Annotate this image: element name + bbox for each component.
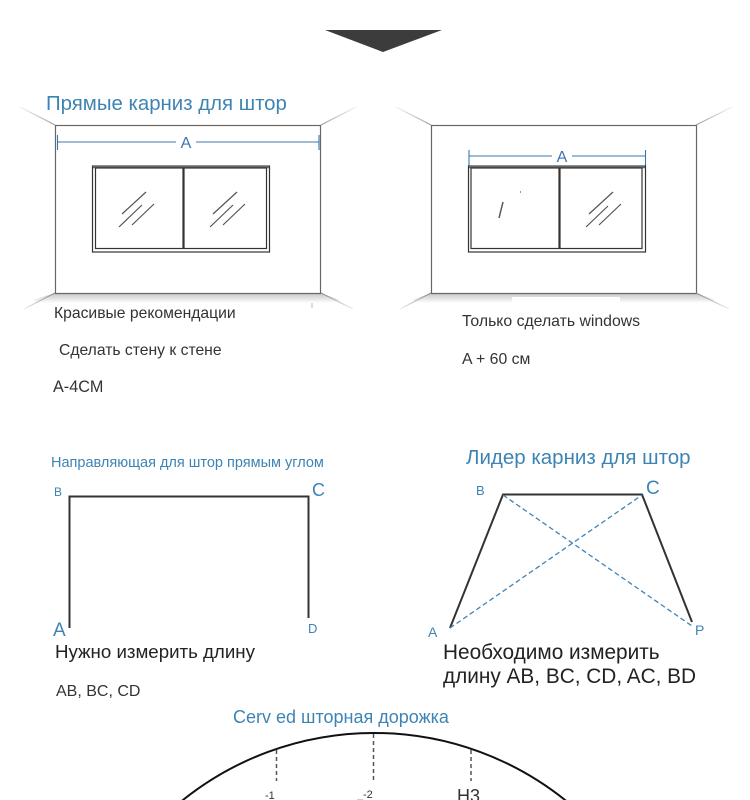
point labels: B [54, 485, 62, 499]
label A: A [181, 135, 192, 152]
point labels: B [476, 483, 485, 498]
diagram: room with window-width measurement [396, 107, 732, 309]
point labels: P [695, 622, 704, 638]
text block: measure length right: Необходимо измерить [443, 641, 660, 664]
text block: left recommendations: Сделать стену к стене [59, 342, 222, 359]
text block: measure length left [55, 641, 256, 700]
heading: curved track: Cerv ed шторная дорожка [233, 707, 450, 727]
point labels: A [428, 624, 438, 640]
heading: straight curtain rods: Прямые карниз для штор [46, 93, 287, 115]
icon: down arrow [325, 30, 442, 52]
window [468, 166, 646, 252]
point labels [428, 478, 704, 640]
text block: measure length right [443, 641, 696, 688]
text block: left recommendations [53, 305, 236, 396]
point labels [53, 480, 325, 641]
diagram: room with wall-to-wall measurement [20, 107, 356, 309]
labels [265, 786, 480, 800]
text block: left recommendations: A-4CM [53, 378, 103, 396]
label A: A [557, 149, 568, 166]
point labels: D [308, 621, 317, 636]
text block: measure length right: длину AB, BC, CD, AC, BD [443, 665, 696, 688]
measurement A [58, 135, 319, 150]
text block: right recommendations: Только сделать windows [462, 313, 640, 330]
diagram: curved track [180, 733, 568, 800]
point labels: C [646, 478, 660, 499]
heading: right-angle track: Направляющая для штор прямым углом [51, 455, 324, 471]
diagram: trapezoid leader track [428, 478, 704, 640]
window [92, 166, 270, 252]
heading: leader rod: Лидер карниз для штор [466, 446, 691, 469]
measurement A [469, 150, 646, 167]
diagram: right-angle track [53, 480, 325, 641]
text block: measure length left: Нужно измерить длину [55, 641, 256, 662]
text block: right recommendations [462, 313, 640, 368]
point labels: C [312, 480, 325, 500]
text block: right recommendations: A + 60 см [462, 351, 530, 368]
text block: measure length left: AB, BC, CD [56, 683, 140, 700]
point labels: A [53, 620, 66, 641]
text block: left recommendations: Красивые рекомендации [54, 305, 236, 322]
